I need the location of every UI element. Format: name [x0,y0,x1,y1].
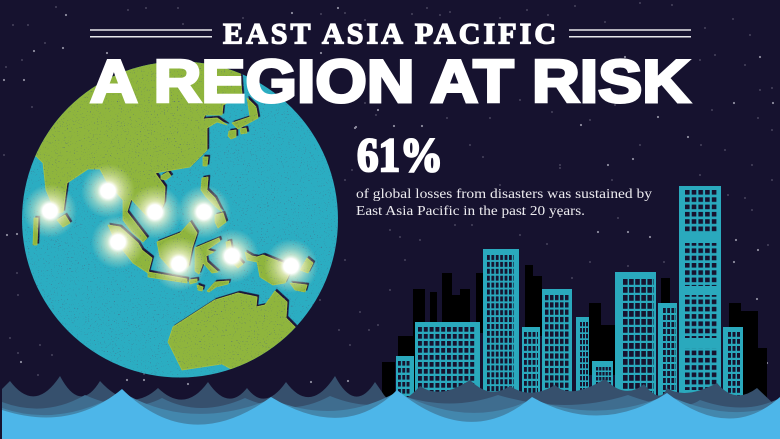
land: Hainan and Taiwan [161,157,208,180]
background silhouettes [382,265,767,410]
land: Moluccas [226,241,243,268]
land: Sumatra [108,225,152,273]
land: Sulawesi [195,238,220,274]
land: Philippines [201,177,226,228]
land: Sri Lanka [57,215,70,227]
main title: A REGION AT RISK [90,48,690,115]
back wave layer [2,376,780,439]
land: Lesser Sunda islands [189,279,229,292]
building: broad tower [615,272,656,404]
lower wave layer [2,392,780,439]
building: right tower [723,327,743,405]
land: Asia with Malay peninsula [35,62,244,242]
land: Borneo [157,222,197,268]
ocean [22,62,338,378]
building: low block [592,361,613,401]
land: western island strip [33,218,38,245]
land: Java [148,272,187,283]
city skyline [382,186,767,410]
statistic description: East Asia Pacific in the past 20 years. [356,204,585,219]
heading: East Asia Pacific: EAST ASIA PACIFIC [223,18,556,50]
building: wide low-rise [415,322,480,402]
building: thin tower [658,303,677,403]
building: tallest tower [679,186,721,404]
land: Japanese southern islands [228,128,247,139]
statistic description: of global losses from disasters was sustained by [356,187,652,202]
land: Australia [168,288,298,370]
building: small left [396,356,414,406]
building: slim tower [576,317,589,402]
flood waves [2,376,780,439]
city lights [23,164,318,293]
globe [20,50,338,390]
statistic: 61%: 61% [357,129,443,182]
map: land masses [32,62,316,370]
building: short tower [522,327,540,402]
land: New Guinea [245,252,291,285]
land: New Guinea east tail [290,258,313,292]
ocean speckle texture [22,61,338,378]
building: narrow tower [483,249,519,404]
building: medium tower [542,289,572,404]
land: Japan [232,98,258,129]
front wave [2,389,780,439]
middle wave layer [2,395,780,439]
